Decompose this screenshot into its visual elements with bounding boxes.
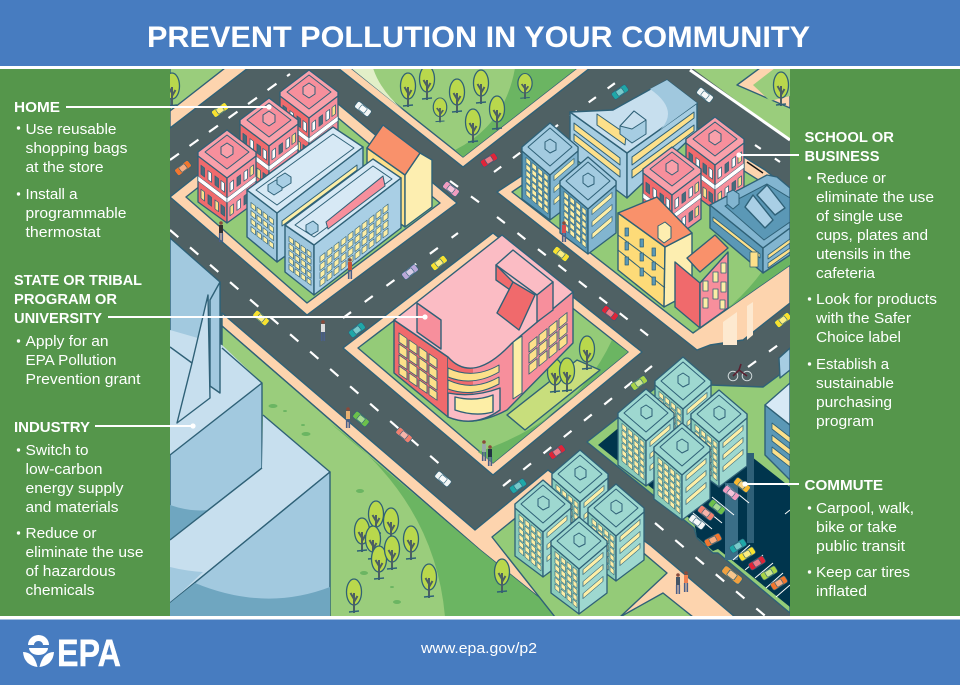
- section: state or tribal program or university: [14, 273, 142, 388]
- pedestrians: [219, 221, 688, 594]
- section: industry: Reduce or: [26, 525, 96, 542]
- section: commute: [804, 478, 914, 600]
- callout line: commute: [742, 481, 799, 487]
- section: home: thermostat: [26, 224, 101, 241]
- home block ground: [170, 83, 457, 315]
- title: PREVENT POLLUTION IN YOUR COMMUNITY: [147, 21, 810, 54]
- header banner: [0, 0, 960, 66]
- teal apartment towers, lower block: [515, 450, 644, 614]
- section: state or tribal program or university: PROGRAM OR: [14, 292, 118, 308]
- pink central building: [394, 235, 573, 421]
- section: commute: bike or take: [816, 519, 897, 536]
- residential tower block ground: [491, 518, 693, 616]
- section: home: [14, 100, 127, 241]
- section: commute: Carpool, walk,: [816, 500, 914, 517]
- red apartment buildings, home block: [198, 70, 338, 223]
- section: school or business: program: [816, 413, 874, 430]
- section: commute: COMMUTE: [804, 478, 883, 494]
- blue office building, home block: [247, 127, 363, 262]
- red brick building, school block: [675, 235, 728, 328]
- section: home: Install a: [26, 186, 78, 203]
- section: home: shopping bags: [26, 140, 127, 157]
- section: industry: energy supply: [26, 480, 124, 497]
- park block: [338, 68, 590, 167]
- section: state or tribal program or university: EPA Pollution: [26, 352, 117, 369]
- section: commute: Keep car tires: [816, 564, 910, 581]
- section: commute: public transit: [816, 538, 906, 555]
- yellow house, school block: [618, 197, 692, 307]
- section: state or tribal program or university: Apply for an: [26, 333, 108, 350]
- section: school or business: SCHOOL OR: [804, 130, 895, 146]
- icon: EPA flower logo: [23, 635, 54, 667]
- panel: left green sidebar: [0, 69, 170, 616]
- callout line: school or business: [736, 152, 799, 158]
- red buildings, school block: [643, 117, 744, 240]
- website url: www.epa.gov/p2: [420, 640, 537, 657]
- section: school or business: of single use: [816, 208, 903, 225]
- section: home: programmable: [26, 205, 126, 222]
- section: industry: and materials: [26, 499, 118, 516]
- section: school or business: Choice label: [816, 329, 901, 346]
- section: home: Use reusable: [26, 121, 116, 138]
- section: school or business: with the Safer: [815, 310, 911, 327]
- section: commute: inflated: [816, 583, 867, 600]
- section: industry: eliminate the use: [26, 544, 144, 561]
- section: school or business: Establish a: [816, 356, 890, 373]
- road network: [170, 69, 790, 616]
- section: home: HOME: [14, 100, 60, 116]
- lane dashes: [170, 74, 785, 620]
- blue building at right edge: [765, 348, 790, 480]
- school and business block ground: [496, 127, 790, 351]
- lower-left lawn and sidewalks: [222, 313, 735, 617]
- section: school or business: utensils in the: [816, 246, 911, 263]
- parking lot block: [587, 367, 790, 613]
- central block ground: [343, 233, 642, 475]
- callout line: state or tribal program or university: [108, 314, 428, 320]
- section: state or tribal program or university: STATE OR TRIBAL: [14, 273, 142, 289]
- large school building: [570, 80, 697, 198]
- teal apartment towers near parking: [618, 357, 747, 520]
- section: industry: chemicals: [26, 582, 94, 599]
- section: industry: Switch to: [26, 442, 88, 459]
- section: school or business: cups, plates and: [816, 227, 928, 244]
- section: industry: INDUSTRY: [14, 420, 90, 436]
- section: industry: of hazardous: [26, 563, 115, 580]
- top-left corner block: [170, 68, 248, 128]
- section: school or business: eliminate the use: [816, 189, 934, 206]
- section: state or tribal program or university: Prevention grant: [26, 371, 141, 388]
- section: state or tribal program or university: UNIVERSITY: [14, 311, 102, 327]
- section: industry: low-carbon: [26, 461, 102, 478]
- section: school or business: purchasing: [816, 394, 892, 411]
- section: industry: [14, 420, 144, 599]
- section: school or business: BUSINESS: [804, 149, 880, 165]
- footer banner: [0, 620, 960, 685]
- section: home: at the store: [26, 159, 104, 176]
- EPA wordmark: EPA: [57, 633, 121, 675]
- callout line: industry: [95, 423, 196, 429]
- callout line: home: [66, 104, 272, 110]
- map: isometric city illustration: [164, 66, 792, 620]
- trees: [164, 66, 788, 613]
- dark blue roofed building with solar panels: [710, 175, 790, 273]
- blue long building, home block: [285, 159, 401, 295]
- section: school or business: cafeteria: [816, 265, 876, 282]
- cars: [174, 84, 792, 591]
- industry building: [170, 238, 330, 617]
- cyclist: [728, 364, 752, 381]
- blue towers, school block: [522, 123, 616, 254]
- yellow gable building, home block: [367, 125, 432, 227]
- panel: right green sidebar: [790, 69, 960, 616]
- lawn speckles: [268, 404, 401, 604]
- section: school or business: sustainable: [816, 375, 894, 392]
- section: school or business: Reduce or: [816, 170, 886, 187]
- section: school or business: Look for products: [816, 291, 937, 308]
- top-right green with white road edge: [690, 68, 790, 140]
- section: school or business: [804, 130, 937, 430]
